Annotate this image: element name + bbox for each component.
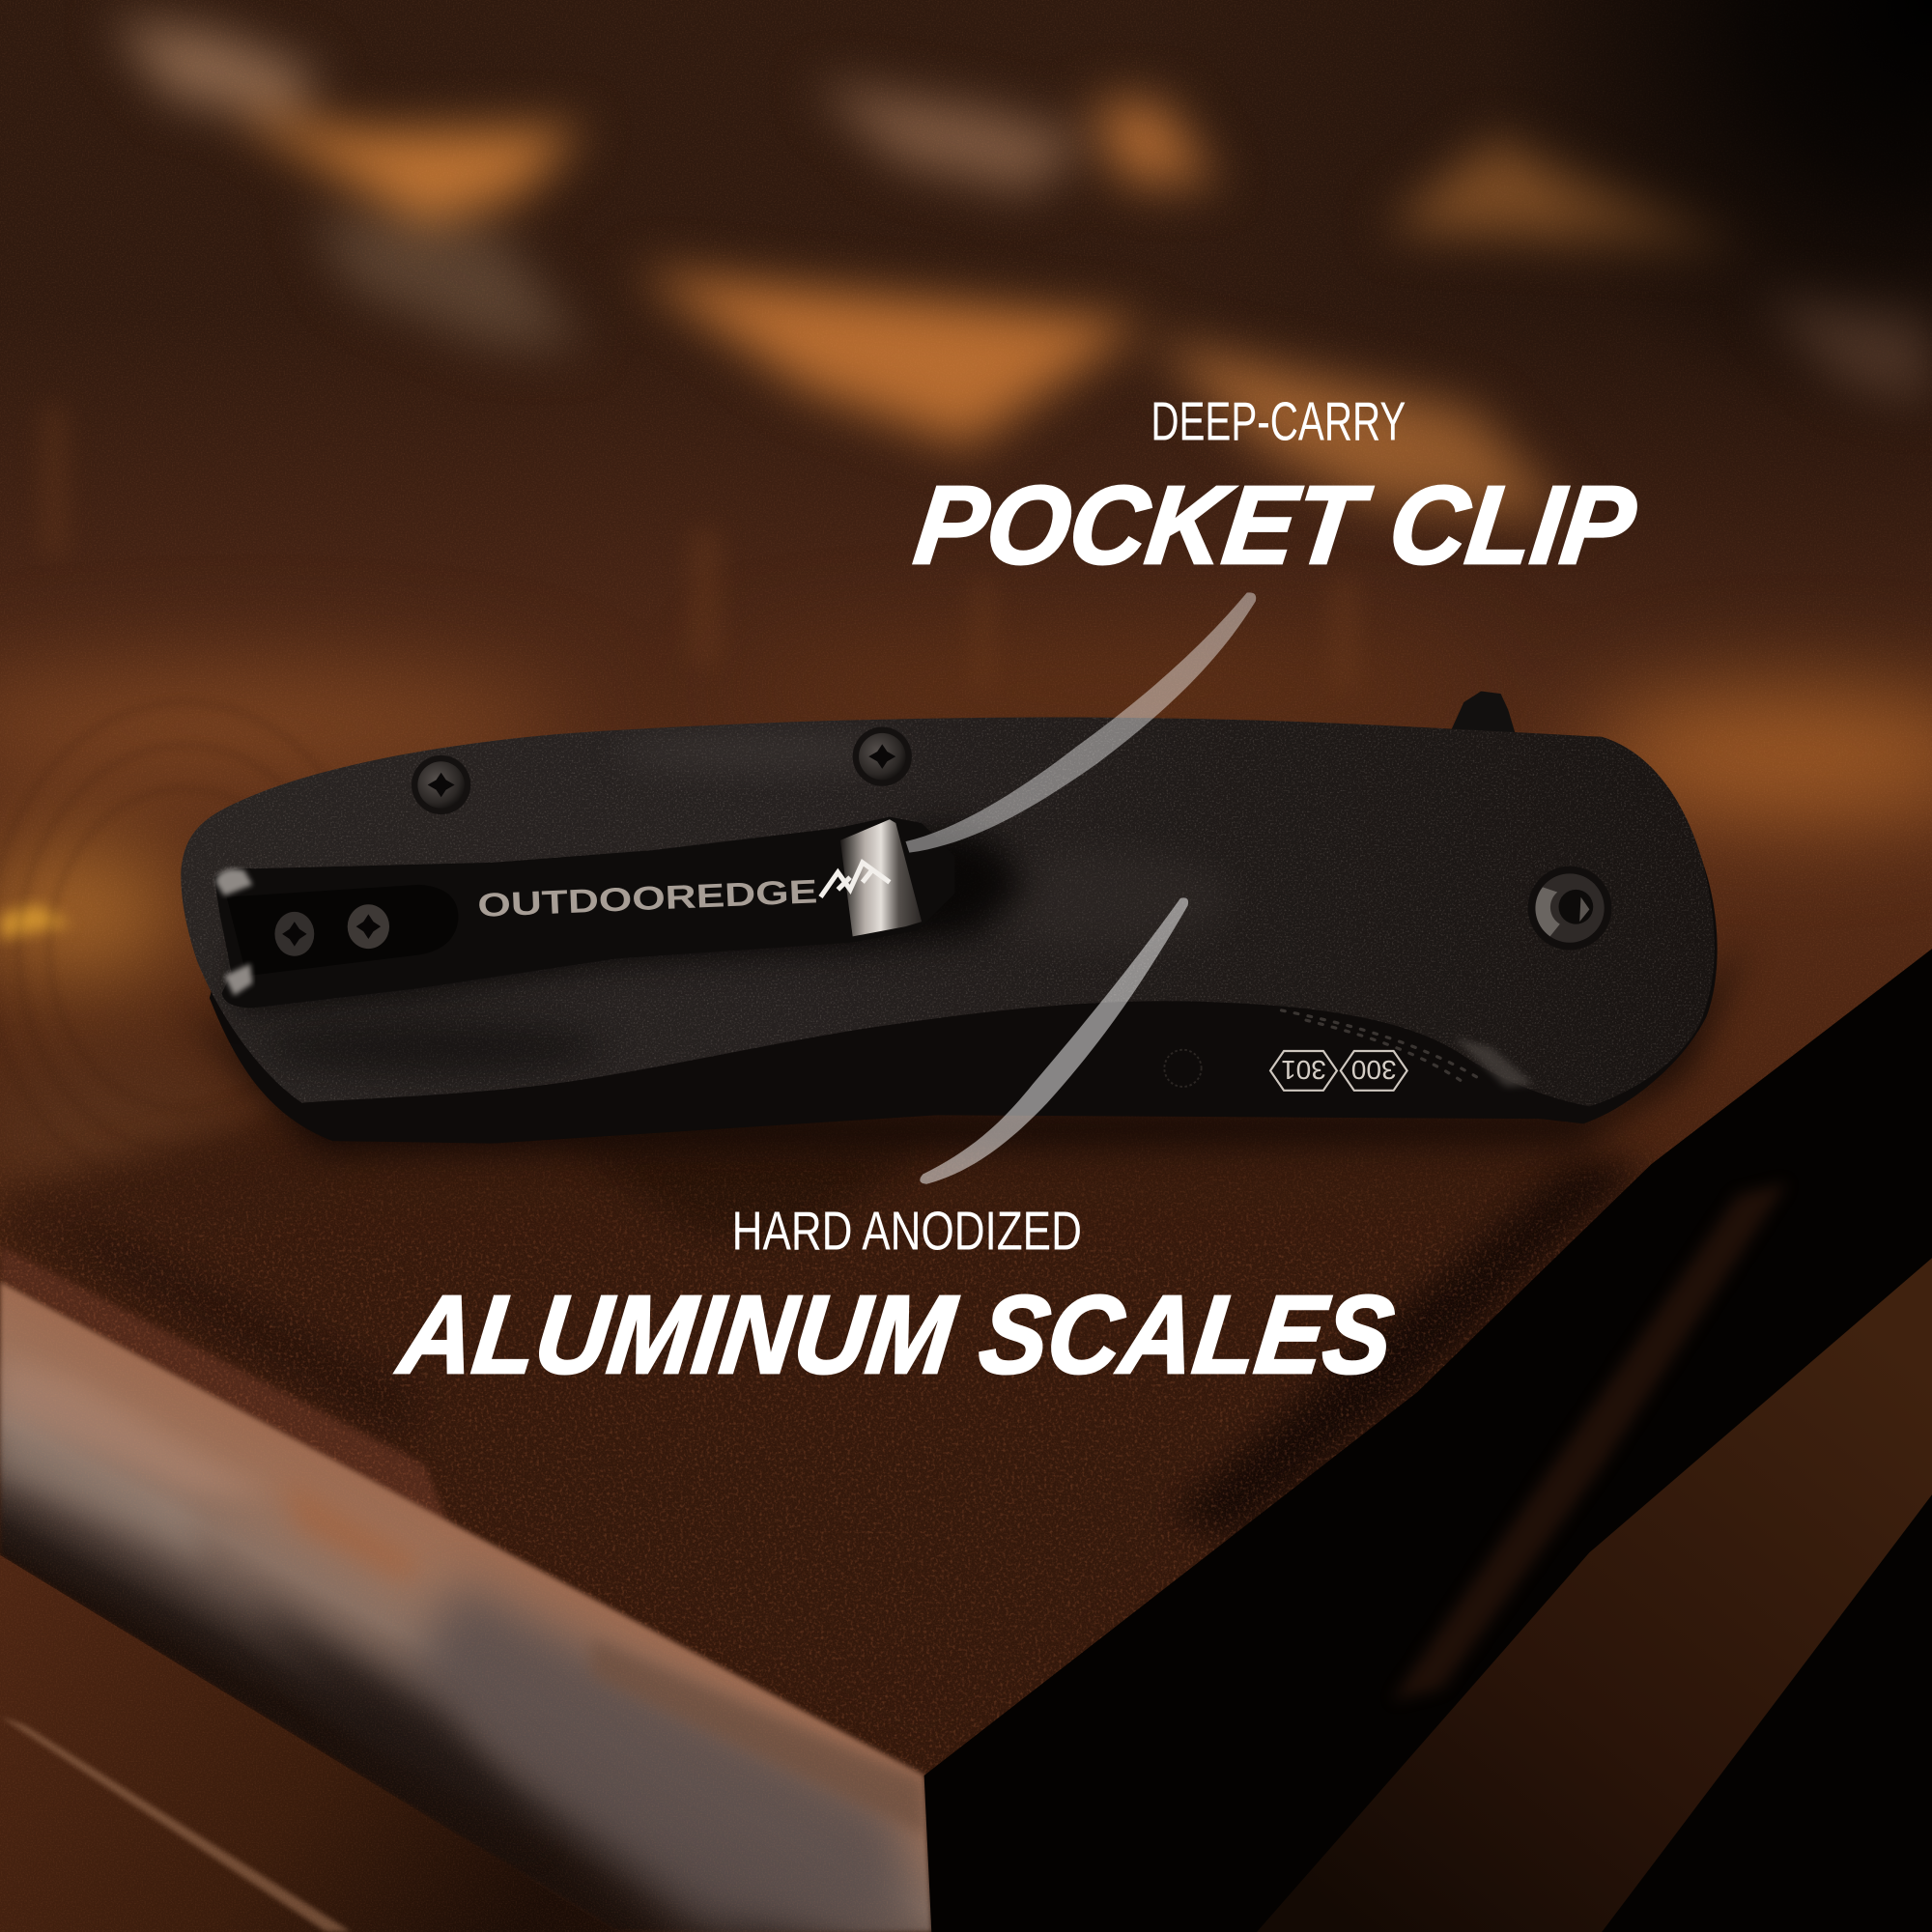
callout: deep-carry pocket clip bbox=[909, 390, 1642, 587]
table edge: lower plank bbox=[0, 1555, 616, 1932]
table edge: front lit bevel bbox=[0, 1282, 931, 1932]
subheading: DEEP-CARRY bbox=[1151, 390, 1406, 451]
steel stamp 300 bbox=[1341, 1051, 1407, 1091]
callout: hard anodized aluminum scales bbox=[391, 1200, 1400, 1397]
clip tail shine bottom bbox=[224, 963, 252, 996]
table edge: narrow brown chamfer bbox=[0, 1246, 450, 1528]
clip mountain logo bbox=[820, 863, 890, 897]
clip fixing screws bbox=[274, 904, 389, 956]
background: blurred wood highlights bbox=[0, 19, 1932, 1208]
pin circle bbox=[1164, 1050, 1202, 1087]
clip body bbox=[214, 817, 955, 1008]
pivot screw bbox=[1528, 867, 1611, 950]
pocket clip bbox=[214, 817, 955, 1008]
knife: cast shadow bbox=[185, 936, 1749, 1152]
frame and lower body bbox=[210, 739, 1718, 1144]
leader line: aluminum scales bbox=[920, 897, 1188, 1184]
steel stamp 300: 300 bbox=[1351, 1055, 1397, 1085]
scale speckled texture bbox=[173, 708, 1725, 1115]
subheading: HARD ANODIZED bbox=[732, 1200, 1082, 1261]
table surface: darker tabletop shading bbox=[0, 1109, 1651, 1776]
screw upper left bbox=[412, 755, 470, 814]
screw upper middle bbox=[853, 727, 912, 786]
heading: ALUMINUM SCALES bbox=[391, 1273, 1400, 1397]
heading: POCKET CLIP bbox=[909, 464, 1642, 587]
background: wood rings left of knife bbox=[0, 702, 382, 1195]
table edge: black shadow bbox=[924, 949, 1932, 1932]
thumb stud bbox=[1452, 692, 1516, 734]
clip engraving: OUTDOOREDGE bbox=[477, 873, 818, 924]
steel stamp 301 bbox=[1270, 1051, 1337, 1091]
handle scale bbox=[181, 718, 1715, 1106]
knife bbox=[173, 692, 1725, 1144]
table edge: right plank bbox=[1257, 1182, 1932, 1932]
steel stamp 301: 301 bbox=[1281, 1055, 1326, 1085]
jimping teeth bbox=[1282, 1010, 1479, 1084]
clip slot bbox=[227, 885, 458, 976]
clip tail shine top bbox=[215, 868, 252, 895]
clip shine bbox=[840, 819, 922, 936]
scale highlight bbox=[1454, 1037, 1534, 1087]
leader line: pocket clip bbox=[906, 592, 1256, 853]
clip shadow bbox=[234, 826, 1029, 1010]
tabletop pebbled grain bbox=[0, 1150, 1650, 1776]
